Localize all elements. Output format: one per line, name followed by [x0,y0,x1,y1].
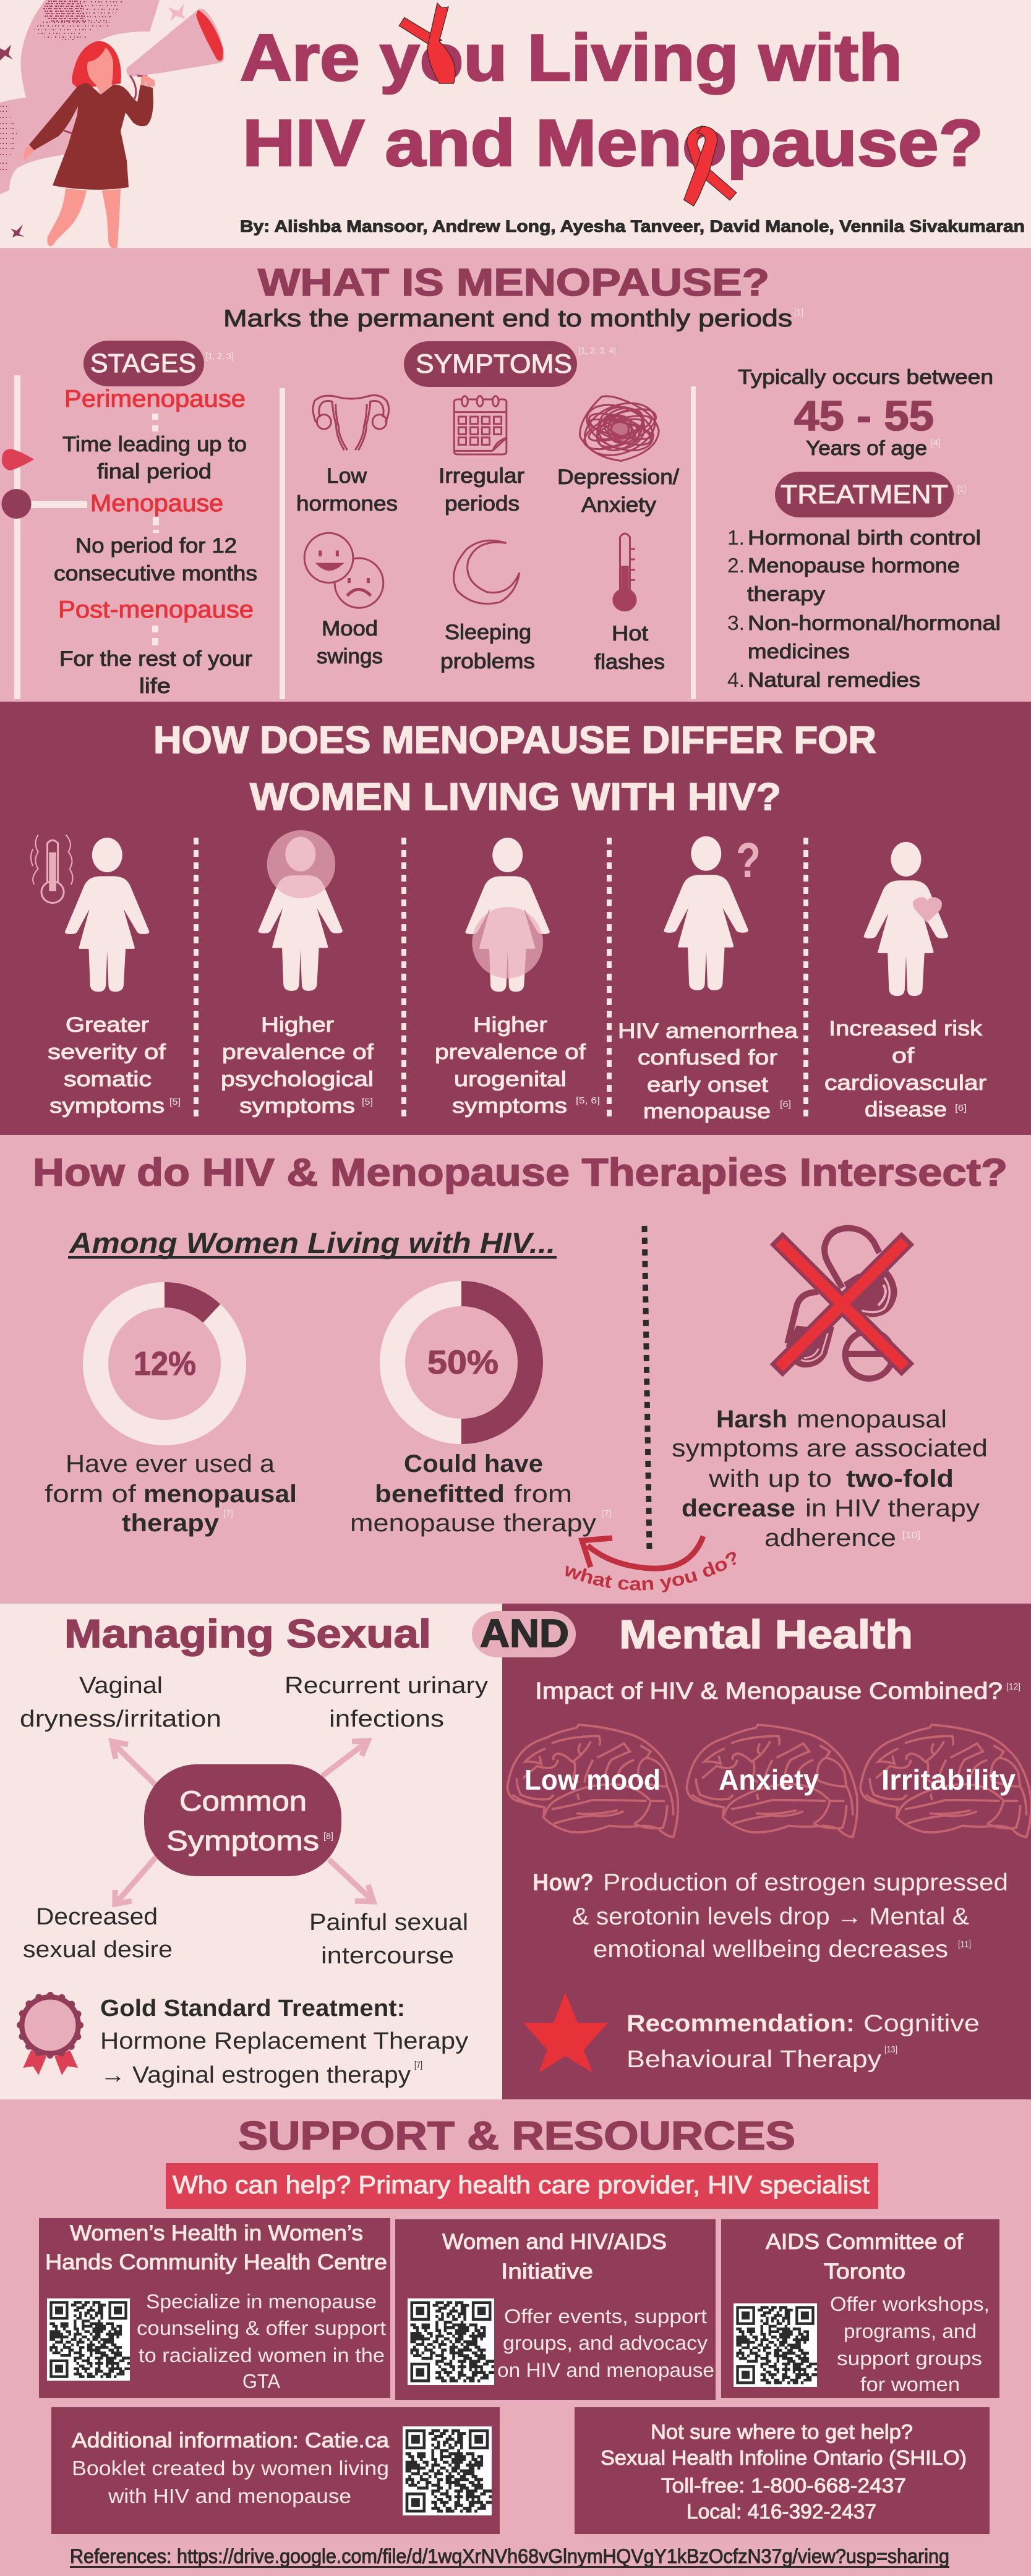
caption: somatic: somatic [64,1068,152,1091]
caption: ever used therapy: [7] [223,1508,233,1519]
caption: ever used therapy [45,1450,297,1537]
symptom labels with arrows: intercourse [321,1943,454,1969]
card: women's health in women's hands [39,2218,390,2398]
caption: somatic [48,1013,181,1118]
card: AIDS committee of Toronto: Toronto [824,2259,905,2284]
text: how: How? [533,1869,594,1896]
treatment list: 3. [727,611,745,634]
qr code [734,2303,823,2387]
symptom labels: hormones [296,492,398,516]
caption: could have benefitted: from [514,1481,572,1508]
icon: thermometer [614,533,636,611]
card: women's health in women's hands: Women’s Health in Women’s [70,2221,363,2245]
treatment list: therapy [747,582,826,605]
treatment list [727,526,1001,691]
caption: psychological: psychological [221,1068,374,1091]
treatment list: Hormonal birth control [748,526,981,549]
symptom labels [296,464,680,674]
brain labels: Anxiety [719,1764,819,1796]
icon: thermometer with heat waves [31,835,73,903]
icon: star [523,1992,608,2073]
icon: scribble [570,396,670,461]
text: recommendation: Behavioural Therapy [627,2046,882,2073]
subheading: combined impact: [12] [1006,1681,1020,1692]
symptom labels: Mood [322,617,378,640]
card: women's health in women's hands: to racialized women in the [139,2344,385,2366]
caption: could have benefitted: Could have [404,1450,543,1477]
banner: who can help: Who can help? Primary health care provider, HIV specialist [173,2170,870,2199]
symptom labels: problems [440,650,535,673]
subheading: among women living with HIV: Among Women Living with HIV... [69,1226,555,1259]
icon: calendar [454,396,507,454]
stage: perimenopause: final period [97,460,212,483]
title: HIV and Menopause? [242,106,983,180]
caption: urogenital [435,1013,600,1118]
symptom labels: Hot [612,622,649,645]
subheading: combined impact: Impact of HIV & Menopause Combined? [535,1678,1003,1704]
heading: differ for women living with HIV [153,719,876,818]
caption: cardiovascular: cardiovascular [824,1071,986,1095]
caption: harsh symptoms: in HIV therapy [805,1495,980,1522]
card: women and HIV/AIDS initiative: Initiative [501,2259,593,2284]
caption: amenorrhea: [6] [780,1099,791,1110]
card: AIDS committee of Toronto: programs, and [844,2320,977,2342]
icon: mood faces [304,533,383,608]
panel: what is menopause [0,248,1031,702]
brain labels: Irritability [881,1764,1016,1796]
text: gold standard treatment: Gold Standard Treatment: [100,1996,405,2021]
card: women and HIV/AIDS initiative [395,2219,716,2400]
pill: AND: AND [480,1611,569,1656]
donut chart: 12 percent: 12% [134,1345,196,1382]
subheading: Marks the permanent end to monthly periods [223,305,792,332]
stages column [1,341,257,699]
caption: somatic: severity of [48,1040,166,1064]
heading: mental health: Mental Health [619,1612,913,1657]
treatment list: Non-hormonal/hormonal [748,611,1001,634]
text: recommendation: [13] [884,2044,897,2055]
heading: differ for women living with HIV: WOMEN LIVING WITH HIV? [250,776,781,818]
symptom labels: Depression/ [557,465,680,489]
caption: somatic: symptoms [49,1094,165,1118]
icon: uterus [313,395,389,450]
age range block [738,365,993,459]
caption: could have benefitted [350,1450,612,1537]
subheading: [1] [794,307,803,318]
caption: harsh symptoms: Harsh [716,1406,787,1433]
caption: cardiovascular: Increased risk [829,1017,983,1040]
symptom labels: Irregular [438,464,524,488]
caption: psychological: Higher [261,1013,334,1037]
caption: somatic: Greater [66,1013,149,1037]
card: women and HIV/AIDS initiative: Offer events, support [504,2305,707,2327]
caption: urogenital: urogenital [454,1068,567,1091]
caption: amenorrhea [618,1019,798,1123]
hub: common symptoms [144,1764,341,1876]
card: women's health in women's hands: Hands Community Health Centre [45,2250,387,2274]
caption: ever used therapy: form of [45,1481,137,1508]
text: gold standard treatment: → Vaginal estrogen therapy [100,2062,411,2088]
caption: amenorrhea: menopause [643,1100,771,1123]
card: SHILO infoline: Sexual Health Infoline Ontario (SHILO) [601,2446,967,2469]
stage: menopause: consecutive months [54,562,257,585]
figure: somatic symptoms [31,835,149,992]
card: SHILO infoline [575,2407,990,2534]
symptom labels with arrows: sexual desire [23,1937,173,1963]
arrow: what can you do: what can you do? [565,1552,736,1592]
caption: psychological: prevalence of [222,1040,374,1064]
symptom labels: periods [445,492,520,516]
age range block: Years of age [806,436,927,459]
treatment list: 1. [727,526,745,549]
caption: harsh symptoms: with up to [708,1465,832,1492]
symptom labels: swings [317,645,383,668]
donut chart: 50 percent [392,1293,531,1432]
caption: urogenital: symptoms [452,1094,567,1118]
symptom labels with arrows: Recurrent urinary [284,1673,488,1699]
pill: stages [83,341,234,386]
caption: psychological: [5] [362,1097,373,1107]
text: how [533,1869,1008,1963]
caption: ever used therapy: Have ever used a [66,1450,275,1477]
caption: could have benefitted: [7] [601,1508,612,1519]
pill: symptoms: SYMPTOMS [416,349,572,379]
caption: urogenital: [5, 6] [576,1095,600,1106]
text: how: [11] [958,1939,971,1950]
banner: who can help [166,2163,878,2209]
symptom labels: Anxiety [581,493,656,517]
panel: mental health [502,1604,1031,2099]
caption: ever used therapy: menopausal [143,1481,297,1508]
caption: amenorrhea: early onset [647,1073,769,1097]
header panel [0,0,1031,249]
symptom labels: Sleeping [445,621,531,644]
symptom labels with arrows: dryness/irritation [20,1706,221,1732]
caption: cardiovascular: [6] [955,1103,967,1113]
qr code [47,2298,135,2381]
card: additional information: Booklet created by women living [72,2457,389,2480]
treatment list: 2. [727,554,745,577]
text: how: Production of estrogen suppressed [603,1869,1008,1896]
icon: brains [507,1725,1031,1837]
brain labels [524,1764,1016,1796]
card: SHILO infoline: Toll-free: 1-800-668-2437 [661,2474,906,2497]
card: women and HIV/AIDS initiative: on HIV and menopause [497,2359,714,2381]
stage: post-menopause [58,597,254,698]
arrows [112,1741,374,1904]
caption: harsh symptoms: menopausal [797,1406,947,1433]
caption: could have benefitted: menopause therapy [350,1510,596,1537]
references: References: https://drive.google.com/file/d/1wqXrNVh68vGlnymHQVgY1kBzOcfzN37g/view?usp=sharing [70,2545,949,2567]
pill: treatment [775,472,966,517]
card: women and HIV/AIDS initiative: Women and HIV/AIDS [442,2230,667,2254]
figure: urogenital symptoms [465,838,550,992]
caption: urogenital: prevalence of [435,1040,586,1064]
symptom labels: Low [327,464,367,488]
icon: red ribbon over you [399,3,455,83]
caption: urogenital: Higher [473,1013,547,1037]
card: additional information: Additional information: Catie.ca [72,2429,389,2452]
symptom labels with arrows: Decreased [36,1904,158,1930]
icon: question mark: ? [736,833,761,888]
caption: psychological: symptoms [239,1094,355,1118]
card: women's health in women's hands: Specialize in menopause [146,2290,377,2313]
donut chart: 50 percent: 50% [427,1344,498,1381]
card: women and HIV/AIDS initiative: groups, and advocacy [503,2332,708,2354]
treatment block [727,472,1001,691]
caption: amenorrhea: confused for [638,1046,777,1069]
caption: harsh symptoms: [10] [902,1530,920,1541]
stage: perimenopause [62,386,247,483]
caption: harsh symptoms: symptoms are associated [672,1435,988,1462]
heading: what is menopause: WHAT IS MENOPAUSE? [258,261,769,304]
symptom labels with arrows: infections [329,1706,444,1732]
brain labels: Low mood [524,1764,661,1796]
caption: cardiovascular [824,1017,986,1121]
caption: cardiovascular: of [892,1044,915,1068]
caption: harsh symptoms: decrease [682,1495,795,1522]
title [240,20,983,180]
caption: harsh symptoms [672,1406,988,1552]
caption: harsh symptoms: two-fold [846,1465,954,1492]
treatment list: Menopause hormone [748,554,960,577]
age range block: [4] [931,438,941,448]
icon: crossed-out pills [776,1228,908,1379]
card: SHILO infoline: Not sure where to get help? [651,2420,913,2443]
card: SHILO infoline: Local: 416-392-2437 [687,2500,876,2523]
pill: treatment: [1] [957,484,966,495]
qr code [403,2426,497,2515]
symptom labels with arrows [20,1673,488,1969]
pill: stages: [1, 2, 3] [205,351,234,362]
card: additional information [51,2407,500,2534]
title: Are you Living with [240,20,902,95]
treatment list: Natural remedies [748,668,920,691]
caption: cardiovascular: disease [865,1098,947,1121]
stage: perimenopause: Time leading up to [62,433,247,456]
stage: perimenopause: Perimenopause [64,386,246,412]
stage: post-menopause: life [139,674,171,698]
figure: cardiovascular [864,842,948,996]
caption: psychological [221,1013,374,1118]
pill: treatment: TREATMENT [781,480,948,509]
text: gold standard treatment: Hormone Replacement Therapy [100,2028,468,2054]
age range block: Typically occurs between [738,365,993,388]
icon: crescent moon [454,540,520,604]
heading: therapies intersect: How do HIV & Menopause Therapies Intersect? [33,1151,1007,1194]
text: gold standard treatment [100,1996,468,2088]
panel: how does menopause differ [0,702,1031,1135]
text: recommendation: Cognitive [863,2010,980,2037]
card: women's health in women's hands: counseling & offer support [137,2317,386,2339]
hub: common symptoms: [8] [323,1831,333,1842]
pill: symptoms [404,341,616,387]
pill: symptoms: [1, 2, 3, 4] [578,346,616,356]
heading: support and resources: SUPPORT & RESOURCES [238,2113,795,2158]
pill: stages: STAGES [90,349,196,378]
symptom labels with arrows: Vaginal [79,1673,163,1699]
heading: differ for women living with HIV: HOW DOES MENOPAUSE DIFFER FOR [153,719,876,762]
caption: could have benefitted: benefitted [375,1481,505,1508]
panel: support and resources [0,2099,1031,2576]
caption: somatic: [5] [169,1097,181,1107]
hub: common symptoms: Symptoms [166,1825,319,1856]
icon: red ribbon over menopause [684,126,737,206]
card: women's health in women's hands: GTA [242,2370,281,2392]
qr code [408,2298,500,2385]
authors: By: Alishba Mansoor, Andrew Long, Ayesha Tanveer, David Manole, Vennila Sivakumaran [240,217,1025,236]
age range block: 45 - 55 [794,393,934,440]
figure: psychological symptoms [258,830,343,991]
stage: post-menopause: Post-menopause [58,597,254,623]
treatment list: medicines [748,640,850,663]
card: AIDS committee of Toronto [721,2219,999,2398]
card: AIDS committee of Toronto: for women [860,2373,960,2395]
symptom labels with arrows: Painful sexual [309,1910,468,1936]
card: AIDS committee of Toronto: AIDS Committee of [766,2230,963,2254]
hub: common symptoms: Common [179,1785,307,1817]
text: how: emotional wellbeing decreases [593,1936,948,1963]
donut chart: 12 percent [95,1294,234,1433]
stage: menopause: No period for 12 [75,534,237,558]
stage: post-menopause: For the rest of your [59,647,252,671]
panel: managing sexual health [0,1604,502,2099]
caption: ever used therapy: therapy [122,1510,220,1537]
text: gold standard treatment: [7] [414,2060,422,2070]
stage: menopause: Menopause [90,490,223,517]
icon: medal [19,1994,81,2075]
card: additional information: with HIV and menopause [108,2485,351,2507]
illustration: woman with megaphone [0,0,225,249]
text: how: & serotonin levels drop → Mental & [572,1903,969,1930]
card: AIDS committee of Toronto: support groups [837,2347,982,2370]
figure: HIV amenorrhea [664,833,761,990]
timeline markers [1,449,87,519]
stage: menopause [54,490,257,585]
heading: managing sexual: Managing Sexual [64,1611,431,1656]
symptom labels: flashes [594,650,665,674]
panel: therapies intersect [0,1135,1031,1604]
text: recommendation [627,2010,980,2073]
treatment list: 4. [727,668,745,691]
caption: amenorrhea: HIV amenorrhea [618,1019,798,1043]
caption: harsh symptoms: adherence [764,1524,896,1552]
symptoms column [280,341,696,699]
card: AIDS committee of Toronto: Offer workshops, [830,2293,990,2315]
text: recommendation: Recommendation: [627,2010,855,2037]
